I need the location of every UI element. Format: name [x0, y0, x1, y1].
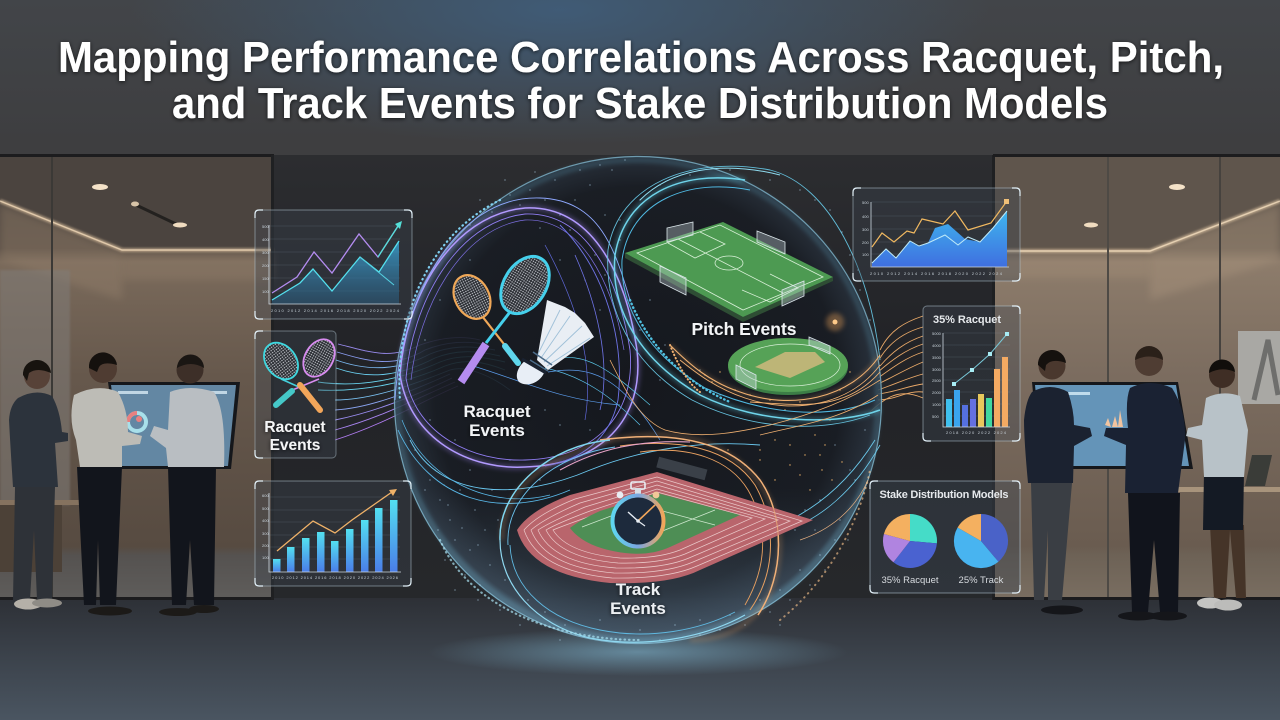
panel: top-left line chart: 2010 2012 2014 2016 2018 2020 2022 2024 — [271, 308, 400, 313]
title — [58, 33, 1224, 128]
label: racquet events: Events — [469, 421, 525, 440]
pie chart: racquet — [883, 514, 937, 568]
panel: top-left line chart: 300 — [262, 250, 269, 255]
pie labels: 35% Racquet — [881, 575, 939, 586]
wall screen right — [1032, 382, 1193, 469]
panel: combined chart with 35% Racquet: 2500 — [932, 378, 942, 383]
pie labels: 25% Track — [959, 575, 1004, 586]
wall screen left — [108, 382, 240, 469]
label: racquet events: Racquet — [463, 402, 531, 421]
floor glow beneath sphere — [428, 628, 848, 676]
person C — [1186, 359, 1248, 610]
panel: bottom-left bar chart: 300 — [262, 531, 269, 536]
cyan pitch orbit — [608, 166, 880, 426]
panel: top-right area chart: 200 — [862, 240, 869, 245]
panel: combined chart with 35% Racquet: 1000 — [932, 402, 942, 407]
icon: running track — [517, 457, 813, 583]
panel: combined chart with 35% Racquet: 500 — [932, 414, 939, 419]
cyan racquet — [461, 248, 559, 382]
person 1 — [9, 360, 68, 610]
icon: crossed racquets — [257, 334, 341, 410]
icon: stopwatch — [611, 482, 665, 548]
pie labels — [881, 575, 1004, 586]
panel: top-right area chart: 2010 2012 2014 2016 2018 2020 2022 2024 — [870, 271, 1003, 276]
panel: bottom-left bar chart: 100 — [262, 555, 269, 560]
panel: bottom-left bar chart: 2010 2012 2014 2016 2018 2020 2022 2024 2026 — [272, 575, 399, 580]
panel: combined chart with 35% Racquet: 2000 — [932, 390, 942, 395]
label: track events: Track — [616, 580, 660, 599]
track orbit — [440, 435, 880, 642]
panel: bottom-left bar chart: 200 — [262, 543, 269, 548]
track orbit over field — [758, 480, 779, 615]
person B — [1104, 346, 1187, 620]
panel: top-right area chart: 100 — [862, 252, 869, 257]
panel: stake distribution models — [870, 481, 1020, 593]
particles — [415, 160, 870, 640]
orange pitch stream — [610, 345, 880, 435]
panel: top-right area chart: 300 — [862, 227, 869, 232]
panel: top-right area chart: 500 — [862, 200, 869, 205]
panel: top-right area chart — [853, 188, 1020, 281]
panel: top-left line chart: 150 — [262, 276, 269, 281]
panel: top-left line chart: 400 — [262, 237, 269, 242]
icon: cricket stadium — [728, 337, 848, 395]
chart title: 35% Racquet — [933, 314, 1001, 326]
panel: top-right area chart: 400 — [862, 214, 869, 219]
panel: combined chart with 35% Racquet: 3500 — [932, 355, 942, 360]
icon: football pitch — [625, 222, 833, 322]
right group of people and screen — [1024, 346, 1248, 620]
label: pitch events: Pitch Events — [691, 319, 797, 339]
connection streams: sphere to right chart — [870, 316, 923, 412]
panel: combined chart with 35% Racquet: 3000 — [932, 367, 942, 372]
right glass room — [992, 154, 1280, 600]
panel: top-left line chart: 100 — [262, 289, 269, 294]
panel title: Stake Distribution Models — [880, 489, 1008, 501]
panel: combined chart with 35% Racquet: 2018 2020 2022 2024 — [946, 430, 1007, 435]
pie chart: track — [954, 514, 1008, 568]
left group of people and screen — [9, 352, 240, 616]
label: Racquet — [264, 419, 326, 436]
panel: top-left line chart: 200 — [262, 263, 269, 268]
panel: bottom-left bar chart — [255, 481, 411, 586]
label: track events: Events — [610, 599, 666, 618]
shuttlecock — [517, 300, 594, 384]
title: Mapping Performance Correlations Across Racquet, Pitch, — [58, 33, 1224, 82]
panel: top-left line chart — [255, 210, 412, 319]
panel: top-left line chart: 500 — [262, 224, 269, 229]
panel: racquet events card — [255, 331, 341, 458]
panel: combined chart with 35% Racquet — [923, 306, 1020, 441]
connection streams: racquet panel to sphere — [318, 338, 510, 440]
purple racquet orbit — [395, 198, 760, 503]
panel: bottom-left bar chart: 500 — [262, 506, 269, 511]
icon: racquets and shuttlecock — [446, 248, 594, 384]
panel: combined chart with 35% Racquet: 4000 — [932, 343, 942, 348]
left glass room — [0, 154, 274, 600]
title: and Track Events for Stake Distribution Models — [172, 79, 1108, 128]
orange racquet — [446, 269, 518, 363]
person 2 — [71, 352, 142, 616]
panel: bottom-left bar chart: 400 — [262, 518, 269, 523]
panel: bottom-left bar chart: 600 — [262, 493, 269, 498]
central glass sphere — [394, 156, 882, 644]
person A — [1024, 350, 1092, 614]
person 3 — [150, 354, 224, 616]
label: Events — [270, 437, 320, 454]
panel: combined chart with 35% Racquet: 5000 — [932, 331, 942, 336]
